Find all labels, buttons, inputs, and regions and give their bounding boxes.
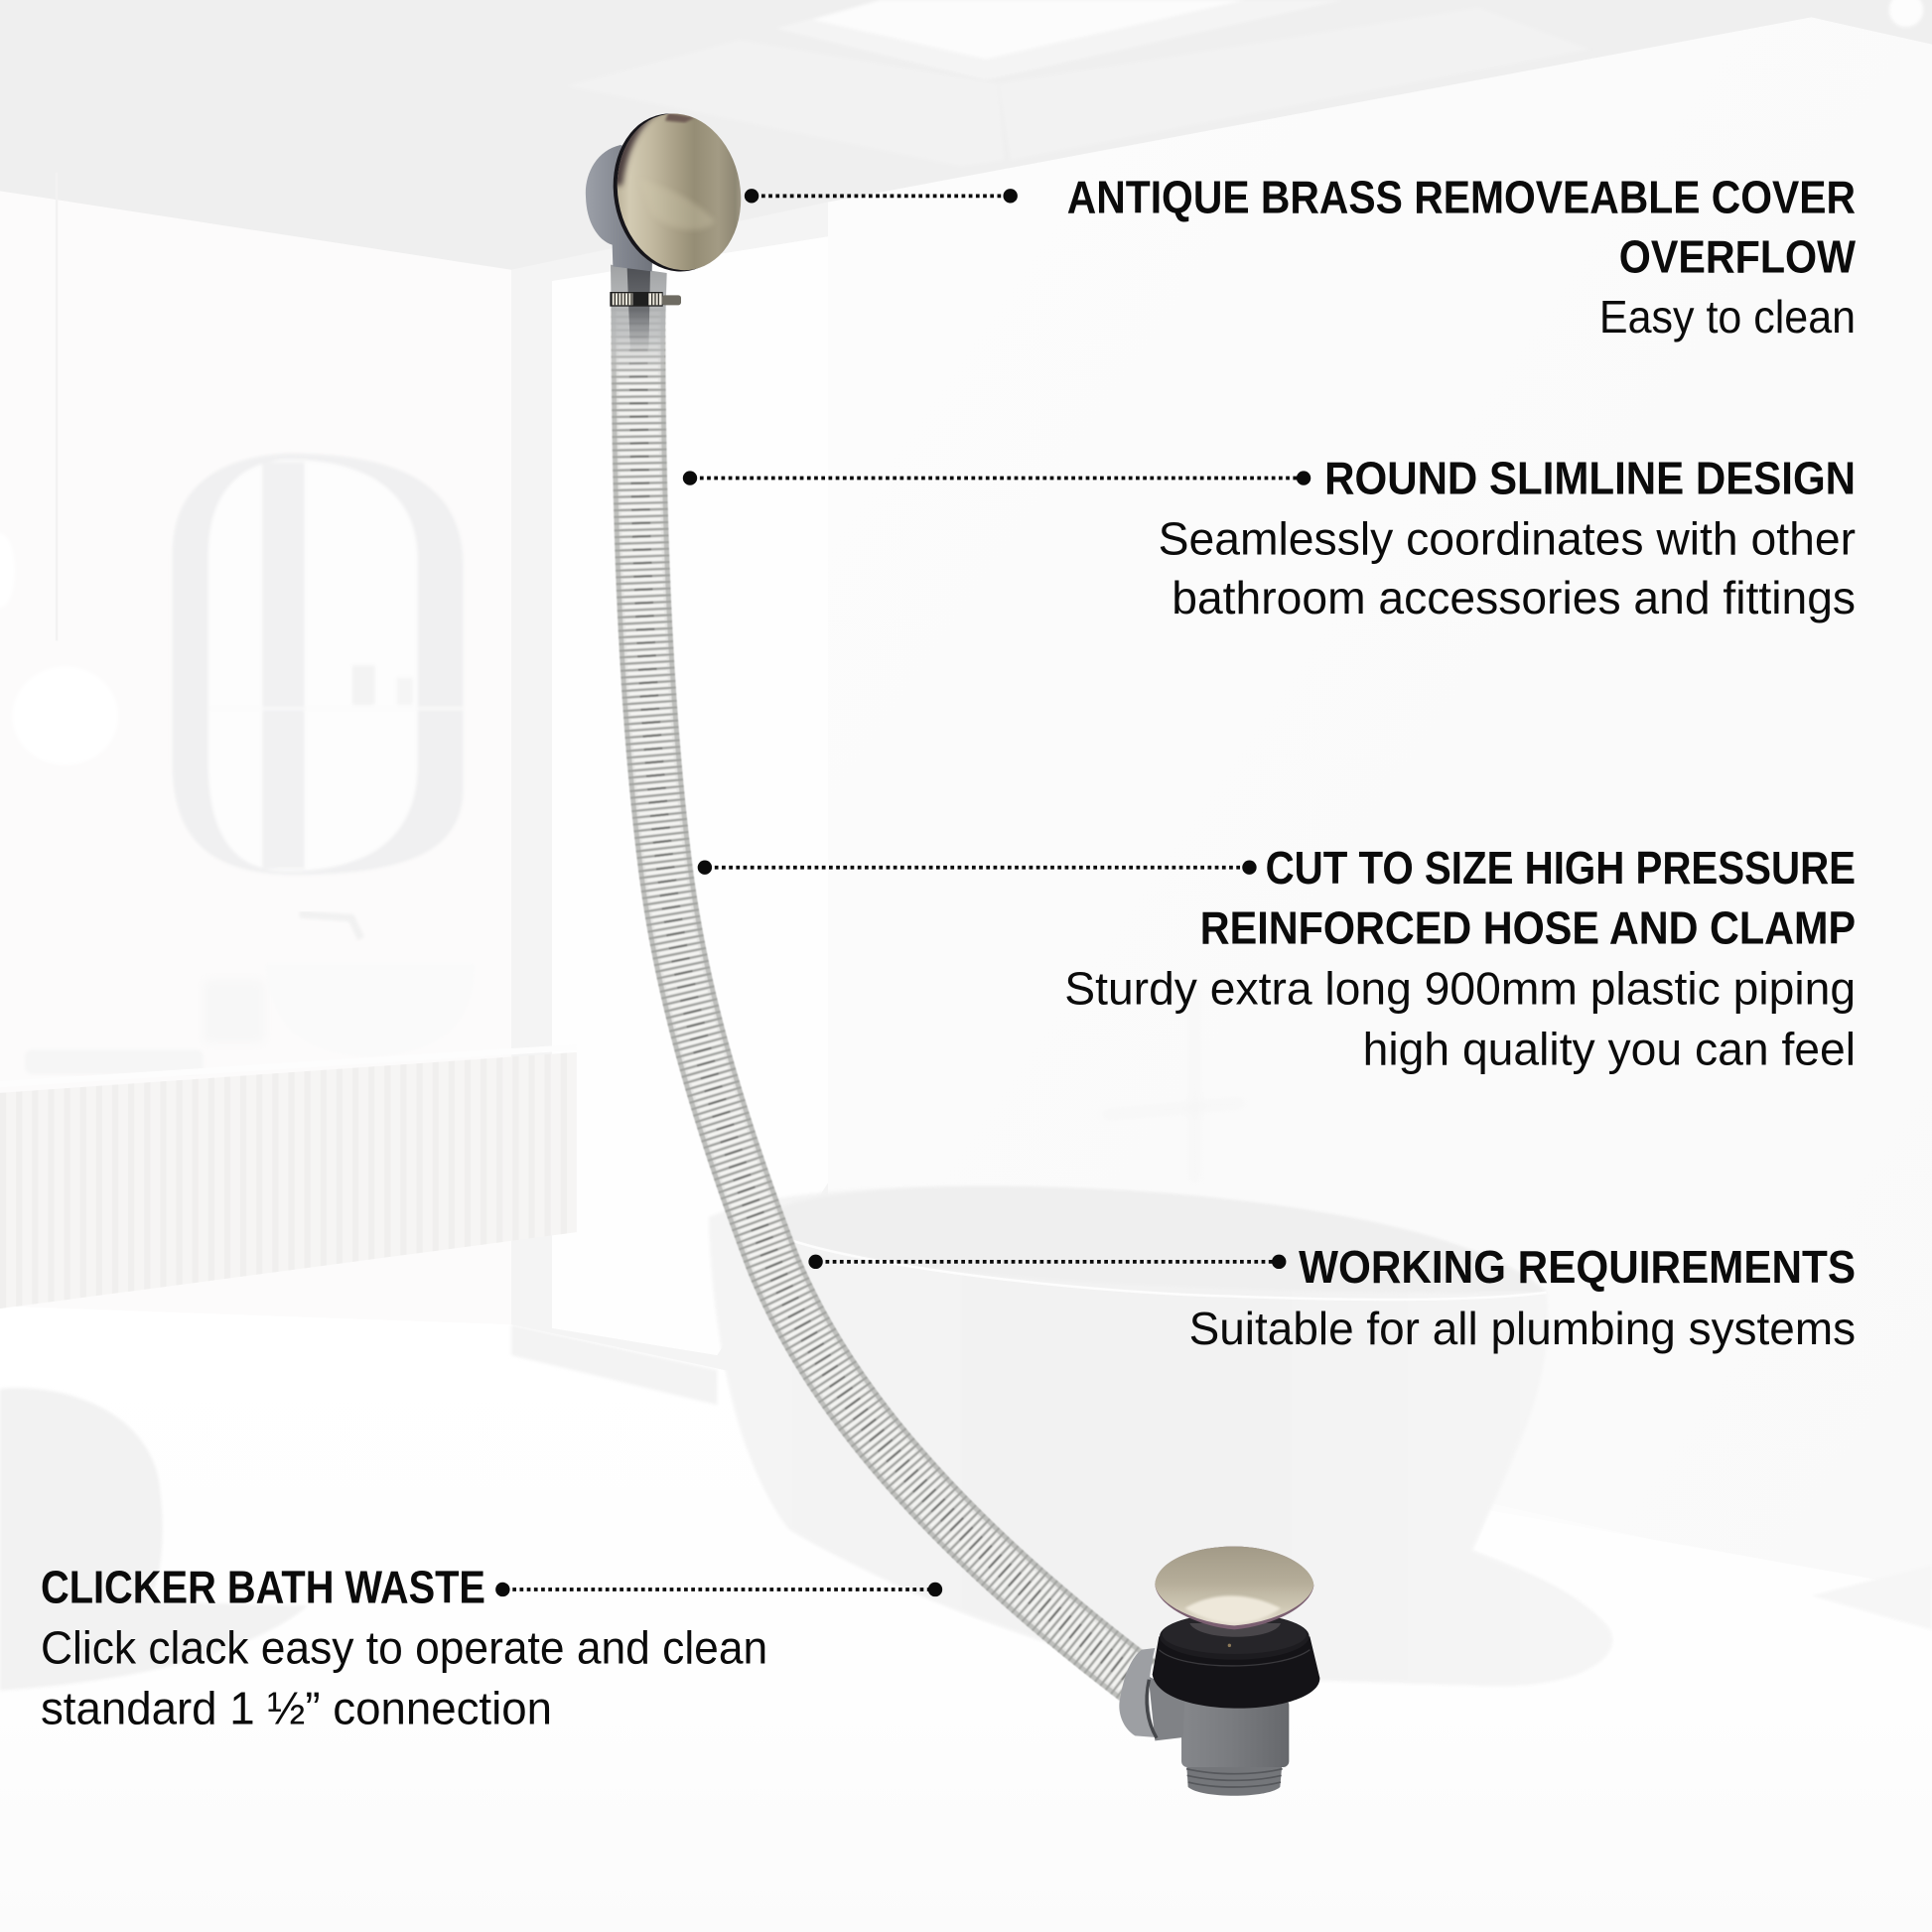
leader line 1 (745, 189, 1018, 204)
hose nut (1119, 1648, 1157, 1737)
cap stem (1189, 1623, 1281, 1637)
callout: clicker bath waste: CLICKER BATH WASTE (41, 1562, 485, 1613)
pouf (0, 1388, 308, 1691)
leader line 2 (683, 471, 1311, 485)
black flange top (1160, 1613, 1310, 1660)
bath inner basin (766, 1186, 1547, 1293)
ceiling spot light (1889, 0, 1923, 27)
clear hose collar (611, 265, 667, 380)
leader line 4 (808, 1255, 1286, 1269)
skylight frame (776, 0, 1343, 80)
callout: clicker bath waste: standard 1 ½” connection (41, 1682, 552, 1733)
vanity unit (0, 1047, 579, 1309)
callout: antique brass removeable cover overflow: ANTIQUE BRASS REMOVEABLE COVER (1067, 172, 1856, 223)
callout: round slimline design (683, 453, 1856, 623)
window column (511, 203, 828, 1392)
bath tub (709, 1186, 1612, 1686)
callout: round slimline design: Seamlessly coordinates with other (1159, 512, 1856, 564)
brushed brass cover (618, 113, 741, 270)
callout: cut to size high pressure reinforced hose and clamp: Sturdy extra long 900mm plastic piping (1064, 962, 1856, 1014)
callout: cut to size high pressure reinforced hose and clamp (698, 842, 1856, 1074)
leader line 5 (495, 1583, 942, 1596)
callout: clicker bath waste: Click clack easy to operate and clean (41, 1621, 767, 1673)
callout: antique brass removeable cover overflow: Easy to clean (1599, 291, 1856, 343)
black collar (1153, 1636, 1319, 1709)
callout: cut to size high pressure reinforced hose and clamp: CUT TO SIZE HIGH PRESSURE (1266, 842, 1856, 894)
leader line 3 (698, 861, 1257, 875)
faucet (300, 914, 361, 939)
floor (0, 1307, 1932, 1932)
clicker waste assembly (1119, 1547, 1319, 1796)
callout: cut to size high pressure reinforced hose and clamp: REINFORCED HOSE AND CLAMP (1200, 902, 1856, 954)
mirror (173, 454, 465, 875)
callout: round slimline design: ROUND SLIMLINE DESIGN (1324, 453, 1856, 504)
callout: working requirements: Suitable for all plumbing systems (1189, 1303, 1856, 1354)
right wall (828, 17, 1932, 1601)
pendant lamp (0, 533, 118, 765)
callout: working requirements: WORKING REQUIREMENTS (1299, 1241, 1856, 1293)
left wall (0, 191, 511, 1368)
hose (638, 296, 1140, 1682)
towel and bottles (25, 1049, 204, 1074)
callout: working requirements (808, 1241, 1856, 1354)
callout: antique brass removeable cover overflow (745, 172, 1857, 343)
overflow assembly (586, 113, 741, 371)
grey waste body (1181, 1700, 1289, 1767)
dark reflection on cover (618, 115, 661, 189)
ceiling panels (567, 40, 1004, 167)
callout: cut to size high pressure reinforced hose and clamp: high quality you can feel (1363, 1023, 1856, 1074)
ceiling (0, 0, 1932, 321)
grey overflow body (586, 145, 655, 271)
elbow (1149, 1676, 1184, 1740)
callout: round slimline design: bathroom accessories and fittings (1172, 572, 1856, 623)
wall tap (1103, 986, 1244, 1182)
brushed nickel cap (1155, 1547, 1313, 1629)
threaded tail (1186, 1760, 1283, 1796)
bath rim highlight (788, 1240, 1547, 1300)
basin (265, 964, 475, 1057)
black rim (601, 104, 750, 281)
callout: antique brass removeable cover overflow: OVERFLOW (1619, 230, 1857, 282)
skylight (813, 0, 1244, 60)
hose clamp (610, 292, 681, 307)
callout: clicker bath waste (41, 1562, 942, 1733)
